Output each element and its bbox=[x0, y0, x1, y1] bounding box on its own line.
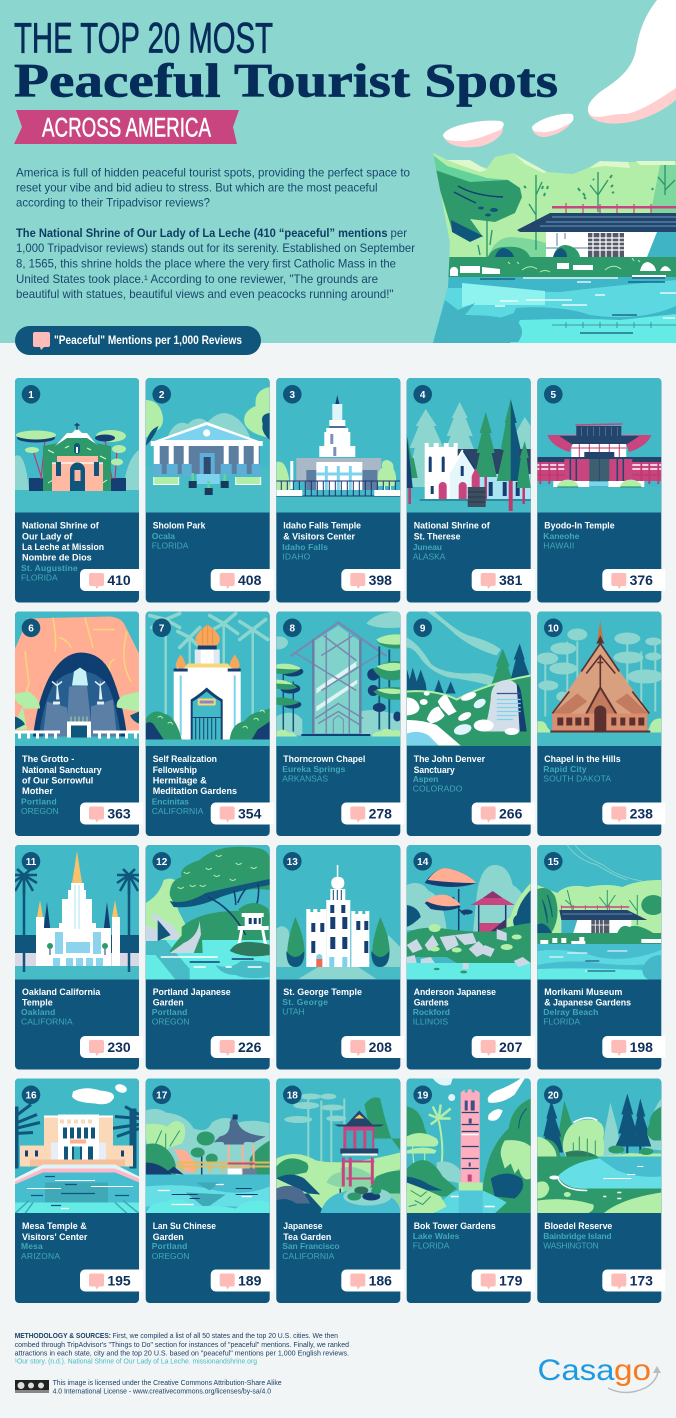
place name: Morikami Museum bbox=[544, 986, 622, 997]
place name bbox=[414, 753, 485, 775]
score pill: 198 bbox=[630, 1039, 653, 1055]
casago logo: go bbox=[614, 1354, 651, 1387]
cloud: small right bbox=[532, 114, 574, 137]
location: ALASKA bbox=[413, 551, 446, 561]
highlight paragraph: 1,000 Tripadvisor reviews) stands out for its serenity. Established on September bbox=[16, 242, 415, 255]
location: Rapid City bbox=[543, 764, 587, 774]
card body bbox=[146, 1078, 270, 1303]
location: ARIZONA bbox=[21, 1251, 60, 1261]
place name: of Our Sorrowful bbox=[22, 774, 93, 786]
card 9 bbox=[407, 612, 535, 836]
score pill bbox=[211, 569, 274, 591]
illustration: thorncrown chapel bbox=[276, 612, 401, 746]
location bbox=[543, 764, 611, 784]
location bbox=[413, 1007, 450, 1027]
card 6 bbox=[15, 612, 143, 836]
intro paragraph bbox=[16, 166, 410, 210]
score pill bbox=[472, 569, 535, 591]
place name: Tea Garden bbox=[283, 1231, 332, 1242]
rank badge bbox=[283, 385, 302, 404]
banner: across america: ACROSS AMERICA bbox=[42, 113, 211, 143]
rank badge: 14 bbox=[417, 857, 429, 868]
location bbox=[413, 542, 446, 561]
location: FLORIDA bbox=[543, 1017, 580, 1027]
rank badge: 6 bbox=[28, 624, 34, 634]
location: St. George bbox=[282, 997, 328, 1007]
rank badge: 20 bbox=[548, 1090, 559, 1102]
methodology and sources: attractions in each state, city and the top 20 U.S. based on "peaceful" mentions per 1,000 English reviews. bbox=[15, 1350, 349, 1358]
location: WASHINGTON bbox=[543, 1240, 599, 1250]
location: Bainbridge Island bbox=[543, 1231, 612, 1241]
location: OREGON bbox=[152, 1251, 189, 1261]
creative commons badge bbox=[15, 1380, 49, 1393]
cloud: large top right bbox=[588, 0, 676, 124]
location: UTAH bbox=[282, 1006, 305, 1016]
card 12 bbox=[146, 845, 274, 1070]
title line 2: Peaceful Tourist Spots bbox=[14, 55, 558, 108]
location bbox=[413, 1231, 460, 1250]
location: HAWAII bbox=[543, 541, 574, 551]
legend pill bbox=[15, 326, 261, 355]
card 8 bbox=[276, 612, 404, 836]
casago logo: Casa bbox=[538, 1354, 615, 1387]
rank badge: 11 bbox=[26, 857, 37, 868]
location: Eureka Springs bbox=[282, 764, 346, 774]
rank badge: 9 bbox=[420, 624, 426, 634]
location: IDAHO bbox=[282, 551, 311, 561]
score pill bbox=[602, 569, 665, 591]
highlight paragraph: per bbox=[390, 227, 407, 240]
rank badge bbox=[413, 1086, 432, 1104]
card 15 bbox=[537, 845, 665, 1070]
illustration: bok tower gardens bbox=[407, 1078, 531, 1214]
card body bbox=[276, 1078, 400, 1303]
place name: National Shrine of bbox=[414, 520, 491, 531]
legend pill: "Peaceful" Mentions per 1,000 Reviews bbox=[54, 333, 242, 347]
rank badge: 18 bbox=[287, 1090, 298, 1102]
illustration: self realization fellowship bbox=[146, 612, 270, 746]
location bbox=[152, 1007, 189, 1027]
location bbox=[152, 531, 189, 551]
location bbox=[282, 764, 346, 784]
card 4 bbox=[407, 378, 535, 602]
place name bbox=[22, 753, 102, 796]
rank badge: 3 bbox=[290, 390, 296, 401]
place name: National Sanctuary bbox=[22, 764, 102, 775]
rank badge: 7 bbox=[159, 624, 165, 634]
score pill bbox=[211, 1270, 274, 1292]
place name: Japanese bbox=[283, 1220, 323, 1231]
score pill: 189 bbox=[238, 1272, 262, 1288]
methodology and sources: METHODOLOGY & SOURCES: bbox=[15, 1333, 111, 1340]
rank badge bbox=[152, 385, 171, 404]
illustration: john denver sanctuary bbox=[407, 612, 531, 746]
location: Delray Beach bbox=[543, 1007, 598, 1017]
card 11 bbox=[12, 845, 143, 1070]
location bbox=[282, 542, 328, 561]
highlight paragraph bbox=[16, 227, 415, 301]
place name bbox=[153, 753, 237, 796]
place name: Byodo-In Temple bbox=[544, 520, 615, 531]
place name: Nombre de Dios bbox=[22, 552, 92, 563]
place name: Mesa Temple & bbox=[22, 1220, 87, 1231]
place name: Self Realization bbox=[153, 753, 217, 764]
location: Aspen bbox=[413, 774, 438, 784]
location bbox=[152, 1241, 189, 1261]
location: St. Augustine bbox=[21, 563, 78, 573]
location: San Francisco bbox=[282, 1241, 340, 1251]
place name: & Japanese Gardens bbox=[544, 997, 631, 1008]
location: Portland bbox=[152, 1241, 187, 1251]
score pill bbox=[80, 1270, 143, 1292]
location: FLORIDA bbox=[21, 573, 58, 583]
place name: La Leche at Mission bbox=[22, 541, 104, 552]
location: FLORIDA bbox=[152, 541, 189, 551]
score pill bbox=[472, 802, 535, 824]
illustration: idaho falls temple bbox=[276, 378, 400, 513]
location: FLORIDA bbox=[413, 1240, 450, 1250]
methodology and sources: combed through TripAdvisor's "Things to Do" section for instances of "peaceful" mentions. Finally, we ranked bbox=[15, 1342, 349, 1349]
license text: 4.0 International License - www.creativecommons.org/licenses/by-sa/4.0 bbox=[53, 1389, 271, 1396]
score pill: 230 bbox=[107, 1039, 131, 1055]
place name: Sholom Park bbox=[153, 520, 206, 531]
score pill: 207 bbox=[499, 1039, 523, 1055]
card 13 bbox=[276, 845, 404, 1070]
card 19 bbox=[407, 1078, 535, 1303]
card body bbox=[537, 1078, 661, 1303]
score pill: 398 bbox=[369, 572, 392, 588]
score pill: 238 bbox=[630, 806, 653, 822]
card 18 bbox=[276, 1078, 404, 1303]
place name bbox=[153, 1220, 216, 1242]
illustration: national shrine bbox=[15, 378, 139, 513]
illustration: morikami museum bbox=[537, 845, 665, 980]
score pill: 226 bbox=[238, 1039, 262, 1055]
card 1 bbox=[15, 378, 143, 602]
score pill: 354 bbox=[238, 806, 262, 822]
score pill bbox=[472, 1270, 535, 1292]
illustration: sholom park bbox=[146, 378, 270, 513]
icon: speech bubble bbox=[33, 332, 50, 350]
score pill bbox=[341, 802, 404, 824]
rank badge bbox=[22, 852, 40, 871]
place name bbox=[283, 520, 361, 541]
place name: Anderson Japanese bbox=[414, 986, 496, 997]
location bbox=[543, 531, 580, 551]
card body bbox=[537, 612, 661, 836]
place name: Our Lady of bbox=[22, 530, 73, 541]
location: Encinitas bbox=[152, 796, 189, 806]
card body bbox=[15, 1078, 139, 1303]
illustration: shrine of st therese bbox=[407, 378, 531, 513]
score pill: 381 bbox=[499, 572, 523, 588]
location: Oakland bbox=[21, 1007, 55, 1017]
place name: Meditation Gardens bbox=[153, 785, 237, 796]
highlight paragraph: beautiful with statues, beautiful views and even peacocks running around!" bbox=[16, 288, 394, 301]
location bbox=[21, 1007, 73, 1027]
score pill bbox=[80, 802, 143, 824]
rank badge bbox=[283, 1086, 302, 1104]
score pill: 195 bbox=[107, 1272, 131, 1288]
card 7 bbox=[146, 612, 274, 836]
rank badge: 19 bbox=[417, 1090, 429, 1102]
card body bbox=[407, 378, 531, 602]
location: Portland bbox=[21, 796, 57, 806]
rank badge bbox=[22, 1086, 40, 1104]
place name: Hermitage & bbox=[153, 774, 207, 786]
rank badge: 4 bbox=[420, 390, 426, 401]
score pill bbox=[341, 1270, 404, 1292]
score pill: 410 bbox=[107, 572, 131, 588]
rank badge: 10 bbox=[548, 624, 559, 634]
score pill bbox=[80, 569, 143, 591]
place name: National Shrine of bbox=[22, 520, 100, 531]
illustration: lan su chinese garden bbox=[146, 1078, 270, 1214]
rank badge bbox=[152, 1086, 171, 1104]
location bbox=[152, 796, 204, 816]
place name: Temple bbox=[22, 997, 53, 1008]
place name bbox=[22, 1220, 88, 1242]
highlight paragraph: United States took place.¹ According to one reviewer, "The grounds are bbox=[16, 273, 378, 286]
place name: Oakland California bbox=[22, 986, 101, 997]
card 16 bbox=[15, 1078, 143, 1303]
score pill bbox=[341, 1036, 404, 1058]
location bbox=[543, 1007, 598, 1027]
methodology and sources: First, we compiled a list of all 50 states and the top 20 U.S. cities. We then bbox=[112, 1333, 338, 1340]
place name: Visitors' Center bbox=[22, 1231, 88, 1242]
rank badge: 15 bbox=[548, 857, 559, 868]
place name: Chapel in the Hills bbox=[544, 753, 621, 764]
highlight paragraph: 8, 1565, this shrine holds the place where the very first Catholic Mass in the bbox=[16, 258, 396, 270]
illustration: byodo-in temple bbox=[537, 378, 661, 513]
highlight paragraph: The National Shrine of Our Lady of La Leche (410 “peaceful” mentions bbox=[16, 227, 388, 240]
card body bbox=[276, 612, 400, 836]
location: CALIFORNIA bbox=[21, 1017, 73, 1027]
cloud: small left bbox=[443, 121, 504, 147]
illustration: anderson japanese gardens bbox=[407, 845, 531, 980]
methodology and sources: ¹Our story. (n.d.). National Shrine of Our Lady of La Leche. missionandshrine.org bbox=[15, 1358, 257, 1366]
place name: The Grotto - bbox=[22, 753, 74, 764]
card body bbox=[15, 378, 139, 602]
card body bbox=[276, 378, 400, 602]
illustration: chapel in the hills bbox=[536, 612, 663, 746]
score pill bbox=[602, 1036, 665, 1058]
location: Kaneohe bbox=[543, 531, 580, 541]
score pill: 208 bbox=[369, 1039, 392, 1055]
rank badge bbox=[544, 852, 563, 871]
place name bbox=[544, 986, 631, 1008]
place name: The John Denver bbox=[414, 753, 485, 764]
score pill bbox=[341, 569, 404, 591]
place name: Gardens bbox=[414, 997, 449, 1008]
place name: St. Therese bbox=[414, 530, 460, 541]
card body bbox=[537, 378, 661, 602]
rank badge: 17 bbox=[156, 1090, 168, 1102]
card body bbox=[15, 845, 139, 1070]
location bbox=[21, 796, 59, 816]
card body bbox=[407, 612, 531, 836]
rank badge: 13 bbox=[287, 857, 298, 868]
location: OREGON bbox=[152, 1017, 189, 1027]
place name: Thorncrown Chapel bbox=[283, 753, 365, 764]
license text: This image is licensed under the Creative Commons Attribution-Share Alike bbox=[53, 1380, 282, 1387]
score pill: 266 bbox=[499, 806, 523, 822]
card body bbox=[537, 845, 661, 1070]
location: Rockford bbox=[413, 1007, 450, 1017]
rank badge bbox=[544, 385, 563, 404]
rank badge bbox=[283, 852, 302, 871]
rank badge bbox=[283, 618, 302, 637]
card 3 bbox=[276, 378, 404, 602]
place name bbox=[283, 1220, 332, 1242]
place name: Garden bbox=[153, 1231, 184, 1242]
score pill: 363 bbox=[107, 806, 131, 822]
place name bbox=[153, 986, 231, 1008]
location: COLORADO bbox=[413, 784, 463, 794]
location: Portland bbox=[152, 1007, 187, 1017]
rank badge: 1 bbox=[28, 390, 34, 401]
location bbox=[282, 997, 328, 1016]
rank badge: 5 bbox=[551, 390, 557, 401]
location: Lake Wales bbox=[413, 1231, 460, 1241]
place name: Idaho Falls Temple bbox=[283, 520, 361, 531]
card body bbox=[146, 612, 270, 836]
card body bbox=[15, 612, 139, 836]
location: OREGON bbox=[21, 806, 59, 816]
place name: Sanctuary bbox=[414, 764, 455, 775]
illustration: st george temple bbox=[276, 845, 400, 980]
location: Mesa bbox=[21, 1241, 43, 1251]
rank badge bbox=[413, 852, 432, 871]
place name: Bok Tower Gardens bbox=[414, 1220, 496, 1231]
intro paragraph: reset your vibe and bid adieu to stress. But which are the most peaceful bbox=[16, 182, 378, 194]
rank badge bbox=[22, 618, 40, 637]
rank badge bbox=[544, 618, 563, 637]
location: SOUTH DAKOTA bbox=[543, 774, 611, 784]
score pill bbox=[211, 1036, 274, 1058]
place name: Fellowship bbox=[153, 764, 197, 775]
intro paragraph: according to their Tripadvisor reviews? bbox=[16, 196, 211, 210]
score pill: 179 bbox=[499, 1272, 523, 1288]
score pill: 186 bbox=[369, 1272, 392, 1288]
place name: Garden bbox=[153, 997, 184, 1008]
rank badge bbox=[152, 852, 171, 871]
card body bbox=[146, 845, 270, 1070]
place name: St. George Temple bbox=[283, 986, 362, 997]
score pill bbox=[602, 1270, 665, 1292]
score pill bbox=[80, 1036, 143, 1058]
card 2 bbox=[146, 378, 274, 602]
rank badge bbox=[413, 618, 432, 637]
place name: & Visitors Center bbox=[283, 530, 355, 541]
location: CALIFORNIA bbox=[282, 1251, 335, 1261]
place name bbox=[414, 520, 491, 541]
location: ARKANSAS bbox=[282, 774, 328, 784]
casago logo bbox=[538, 1354, 661, 1392]
card 17 bbox=[146, 1078, 274, 1303]
rank badge: 2 bbox=[159, 390, 165, 401]
illustration: mesa temple bbox=[15, 1078, 139, 1214]
landscape illustration: japanese garden pond bbox=[433, 153, 676, 343]
card body bbox=[407, 845, 531, 1070]
location: CALIFORNIA bbox=[152, 806, 204, 816]
place name: Bloedel Reserve bbox=[544, 1220, 612, 1231]
card 10 bbox=[536, 612, 665, 836]
card 20 bbox=[537, 1078, 665, 1303]
card body bbox=[407, 1078, 531, 1303]
score pill bbox=[211, 802, 274, 824]
title line 1: THE TOP 20 MOST bbox=[14, 15, 273, 63]
place name: Lan Su Chinese bbox=[153, 1220, 216, 1231]
illustration: oakland temple bbox=[12, 845, 142, 980]
banner: across america bbox=[14, 110, 239, 144]
location bbox=[282, 1241, 340, 1261]
location bbox=[413, 774, 463, 794]
place name bbox=[22, 986, 101, 1008]
location bbox=[21, 1241, 60, 1261]
score pill: 408 bbox=[238, 572, 262, 588]
score pill bbox=[602, 802, 665, 824]
score pill bbox=[472, 1036, 535, 1058]
rank badge bbox=[544, 1086, 563, 1104]
score pill: 278 bbox=[369, 806, 392, 822]
illustration: bloedel reserve bbox=[537, 1078, 661, 1214]
place name bbox=[22, 520, 104, 563]
rank badge bbox=[413, 385, 432, 404]
location: Ocala bbox=[152, 531, 175, 541]
card body bbox=[146, 378, 270, 602]
rank badge bbox=[22, 385, 40, 404]
card 14 bbox=[407, 845, 535, 1070]
card 5 bbox=[537, 378, 665, 602]
place name: Mother bbox=[22, 785, 53, 796]
location: Idaho Falls bbox=[282, 542, 328, 552]
score pill: 173 bbox=[630, 1272, 653, 1288]
illustration: portland japanese garden bbox=[146, 845, 270, 980]
place name bbox=[414, 986, 496, 1008]
intro paragraph: America is full of hidden peaceful tourist spots, providing the perfect space to bbox=[16, 166, 410, 180]
card body bbox=[276, 845, 400, 1070]
location bbox=[543, 1231, 612, 1250]
illustration: the grotto bbox=[15, 612, 139, 746]
header panel bbox=[0, 0, 676, 343]
illustration: japanese tea garden bbox=[276, 1078, 400, 1214]
location: ILLINOIS bbox=[413, 1017, 448, 1027]
location: Juneau bbox=[413, 542, 442, 552]
rank badge: 12 bbox=[156, 857, 168, 868]
score pill: 376 bbox=[630, 572, 653, 588]
methodology and sources bbox=[15, 1333, 349, 1366]
rank badge: 16 bbox=[25, 1090, 37, 1102]
rank badge: 8 bbox=[290, 624, 296, 634]
license text bbox=[53, 1380, 282, 1396]
rank badge bbox=[152, 618, 171, 637]
place name: Portland Japanese bbox=[153, 986, 231, 997]
location bbox=[21, 563, 78, 583]
